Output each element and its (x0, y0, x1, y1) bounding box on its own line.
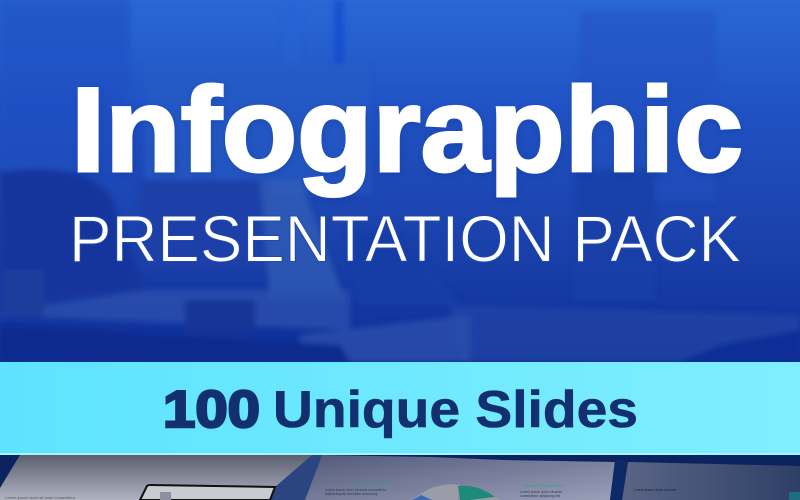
slide 2: puzzle wheel: ADVANCED HEADLINE (353, 482, 391, 486)
title: Infographic (71, 63, 743, 197)
slide 2: puzzle wheel: GROWTH PROJECTIONS (522, 484, 564, 488)
banner text: 100 (163, 381, 260, 439)
slide 2: puzzle wheel: Lorem ipsum dolor sit amet consectetur (325, 488, 387, 492)
banner text: Unique Slides (273, 381, 638, 439)
banner (0, 362, 800, 455)
slide 2: puzzle wheel: Lorem ipsum dolor sit amet (520, 490, 562, 494)
slide 1: laptop (0, 455, 322, 500)
slide 2: puzzle wheel: consectetur adipiscing elit (520, 494, 560, 498)
subtitle: PRESENTATION PACK (69, 202, 741, 276)
slide 1: laptop: Lorem ipsum dolor sit amet consectetur (5, 495, 76, 500)
slide 3 (610, 460, 800, 500)
photo background: blue-tinted office (0, 0, 800, 362)
slide 3: Lorem ipsum dolor sit amet (634, 488, 676, 492)
slide 2: puzzle wheel (305, 455, 615, 500)
slide previews strip (0, 455, 800, 500)
title: Infographic (73, 65, 743, 199)
slide 2: puzzle wheel: adipiscing elit sed diam nonummy (325, 492, 378, 496)
